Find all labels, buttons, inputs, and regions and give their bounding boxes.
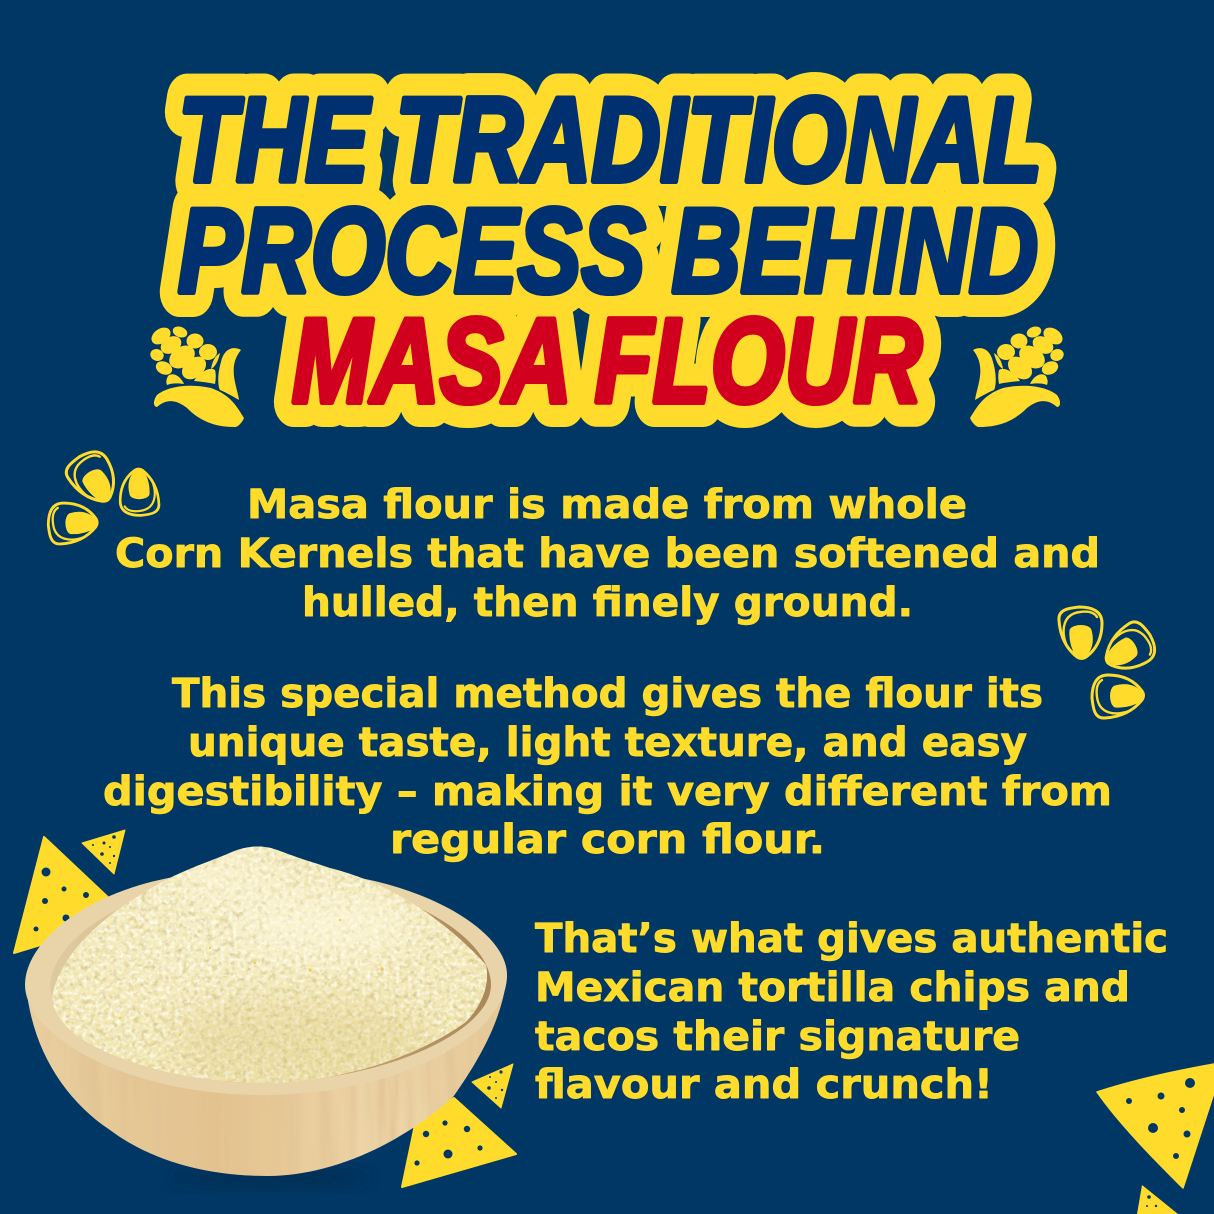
- text block: signature flavour: tacos their signature: [535, 1014, 1020, 1060]
- text block: method: unique taste, light texture, and easy: [188, 720, 1027, 766]
- text block: method: [103, 671, 1112, 863]
- icon: tortilla chip left large: [14, 837, 130, 953]
- text block: intro: Corn Kernels that have been softened and: [115, 531, 1100, 577]
- text block: intro: Masa flour is made from whole: [247, 482, 967, 528]
- text block: method: This special method gives the flour its: [172, 671, 1043, 717]
- icon: tortilla chip left small: [82, 830, 125, 874]
- bowl inner rim: [50, 880, 491, 1083]
- flour mound: [52, 846, 487, 1083]
- title line 3: MASA FLOUR: [292, 294, 922, 428]
- flour specks: [119, 919, 401, 1041]
- icon: kernels top left: [48, 445, 159, 544]
- bowl rim: [25, 870, 507, 1095]
- text block: method: regular corn flour.: [390, 817, 825, 863]
- icon: tortilla chip bowl right large: [402, 1098, 516, 1187]
- icon: corn left: [148, 324, 244, 427]
- bowl shadow: [170, 1171, 370, 1185]
- title outline: [178, 73, 1042, 428]
- title: [178, 73, 1042, 428]
- icon: corn right: [970, 324, 1066, 427]
- icon: tortilla chip bottom right large: [1097, 1064, 1214, 1188]
- icon: tortilla chip bottom right small: [1137, 1185, 1178, 1214]
- text block: method: digestibility – making it very different from: [103, 769, 1112, 815]
- text block: intro: [115, 482, 1100, 626]
- flour shading: [170, 860, 430, 1085]
- text block: signature flavour: [535, 916, 1168, 1108]
- text block: signature flavour: Mexican tortilla chips and: [535, 965, 1130, 1011]
- text block: signature flavour: flavour and crunch!: [535, 1062, 993, 1108]
- title outline: MASA FLOUR: [292, 294, 922, 428]
- icon: tortilla chip bowl right small: [472, 1064, 513, 1108]
- bowl body: [26, 975, 507, 1176]
- bowl of masa flour: [25, 846, 507, 1176]
- text block: signature flavour: That’s what gives authentic: [535, 916, 1168, 962]
- icon: kernels right: [1059, 607, 1161, 718]
- text block: intro: hulled, then finely ground.: [302, 580, 913, 626]
